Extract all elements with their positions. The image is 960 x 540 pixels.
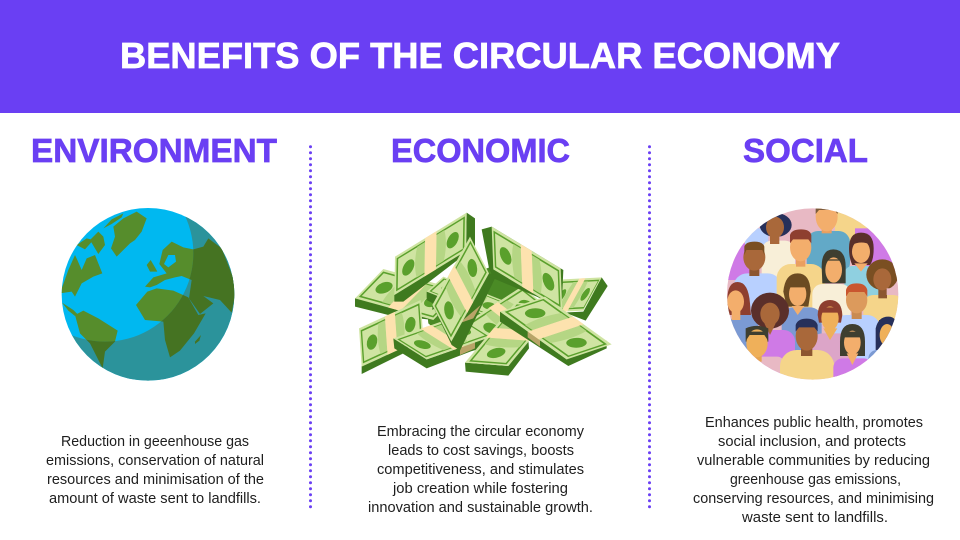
person: right afro	[863, 259, 898, 332]
bundle: left back	[355, 269, 462, 320]
bundle: centre back	[427, 277, 510, 318]
text: economic description: job creation while fostering	[392, 481, 568, 497]
text: social description	[693, 415, 934, 526]
person: top centre	[806, 208, 850, 270]
text: social description: greenhouse gas emissions,	[730, 472, 901, 488]
person: right upper	[844, 233, 879, 299]
bundle: centre vertical	[432, 237, 497, 351]
person: centre red bob	[812, 300, 852, 377]
person: left purple afro	[751, 293, 795, 373]
text: environment description	[46, 434, 264, 507]
bundle: centre middle	[465, 287, 552, 350]
person: bottom right dark bob	[833, 324, 868, 377]
bundle: top right	[482, 227, 563, 311]
text: economic description: innovation and sustainable growth.	[368, 500, 593, 516]
text: economic description: competitiveness, and stimulates	[377, 462, 584, 478]
text: social description: vulnerable communities by reducing	[697, 453, 930, 469]
bundle: left bottom	[359, 300, 423, 374]
person: left dark	[734, 242, 777, 316]
text: economic description	[368, 424, 593, 516]
bundle: top left	[394, 213, 475, 302]
text: environment description: amount of waste sent to landfills.	[49, 491, 261, 507]
text: environment description: Reduction in geeenhouse gas	[61, 434, 249, 450]
person: bottom centre navy	[780, 318, 834, 380]
person: centre red hair	[777, 229, 825, 307]
text: social description: social inclusion, and protects	[718, 434, 906, 450]
icon: earth globe	[60, 207, 237, 383]
text: social description: conserving resources, and minimising	[693, 491, 934, 507]
bundle: right front	[500, 297, 612, 366]
text: environment description: emissions, conservation of natural	[46, 453, 264, 469]
bundle: lower centre left	[393, 316, 492, 368]
heading: social: SOCIAL	[743, 133, 868, 170]
text: social description: waste sent to landfills.	[741, 510, 888, 526]
person: centre left brown hair	[782, 273, 822, 351]
bundle: bottom centre	[465, 303, 558, 376]
text: economic description: Embracing the circular economy	[377, 424, 585, 440]
heading: environment: ENVIRONMENT	[31, 133, 278, 170]
person: far left red hair	[727, 282, 758, 355]
text: social description: Enhances public health, promotes	[705, 415, 923, 431]
text: economic description: leads to cost savings, boosts	[388, 443, 574, 459]
person: centre dark hair	[812, 249, 851, 324]
bundle: right	[545, 277, 608, 321]
icon: pile of money	[355, 213, 612, 376]
text: environment description: resources and minimisation of the	[47, 472, 264, 488]
person: bottom left	[746, 326, 784, 375]
person: right orange hair	[833, 283, 880, 360]
person: afro back	[760, 214, 795, 277]
header banner	[0, 0, 960, 113]
person: far right navy hair	[868, 316, 894, 360]
icon: crowd of people	[727, 208, 898, 380]
heading: economic: ECONOMIC	[391, 133, 570, 170]
title: BENEFITS OF THE CIRCULAR ECONOMY	[120, 35, 840, 76]
money: pile filler	[425, 267, 538, 353]
